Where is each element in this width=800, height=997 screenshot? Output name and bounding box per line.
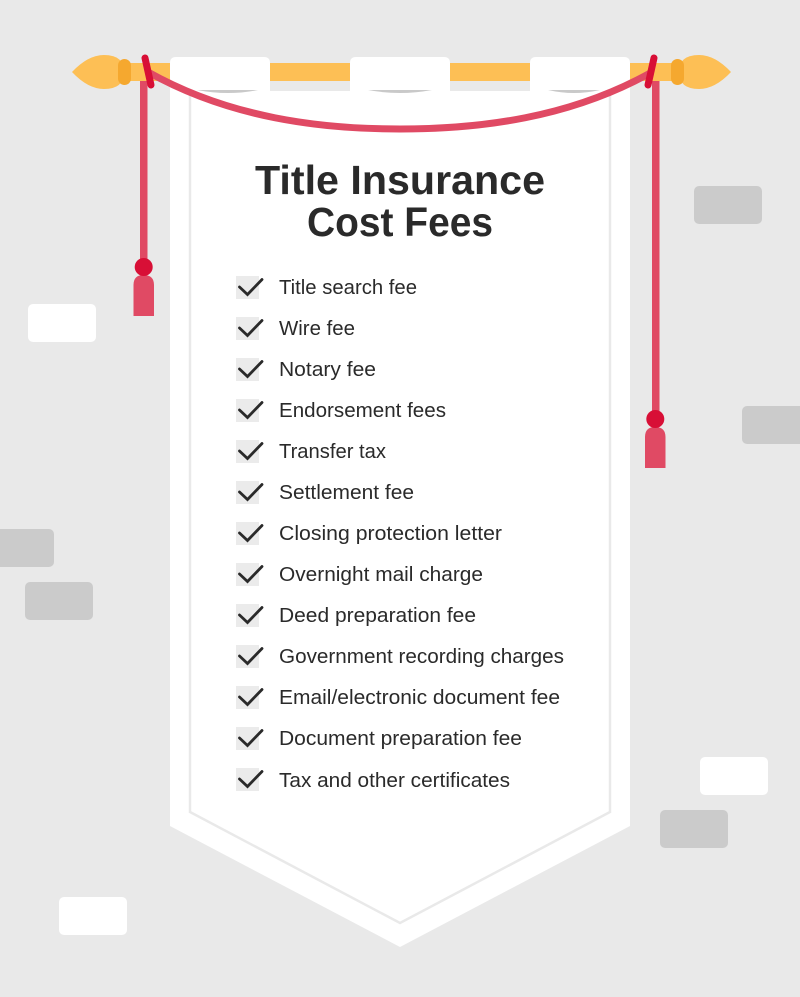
item: Settlement fee: Settlement fee	[279, 482, 414, 504]
item: Notary fee: Notary fee	[279, 359, 376, 381]
item: Government recording charges: Government recording charges	[279, 646, 564, 668]
checklist	[236, 276, 564, 792]
title: Title Insurance	[255, 157, 545, 203]
item: Tax and other certificates: Tax and other certificates	[279, 770, 510, 792]
item: Wire fee: Wire fee	[279, 318, 355, 340]
item: Notary fee	[236, 358, 376, 381]
banner	[170, 91, 630, 947]
item: Endorsement fees: Endorsement fees	[279, 400, 446, 422]
item: Wire fee	[236, 317, 355, 340]
item: Transfer tax	[236, 440, 386, 463]
item: Settlement fee	[236, 481, 414, 504]
item: Deed preparation fee: Deed preparation fee	[279, 605, 476, 627]
item: Document preparation fee: Document preparation fee	[279, 728, 522, 750]
left tassel	[134, 81, 154, 316]
rope ties	[145, 58, 654, 85]
item: Email/electronic document fee: Email/electronic document fee	[279, 687, 560, 709]
item: Overnight mail charge: Overnight mail charge	[279, 564, 483, 586]
item: Closing protection letter: Closing protection letter	[279, 523, 502, 545]
title: Cost Fees	[307, 199, 493, 245]
background bricks	[0, 186, 800, 935]
item: Title search fee: Title search fee	[279, 277, 417, 299]
right tassel	[645, 81, 666, 468]
item: Transfer tax: Transfer tax	[279, 441, 386, 463]
banner tabs	[170, 57, 630, 93]
curtain rod	[72, 55, 731, 89]
rope swag	[148, 72, 652, 129]
title	[255, 157, 545, 245]
